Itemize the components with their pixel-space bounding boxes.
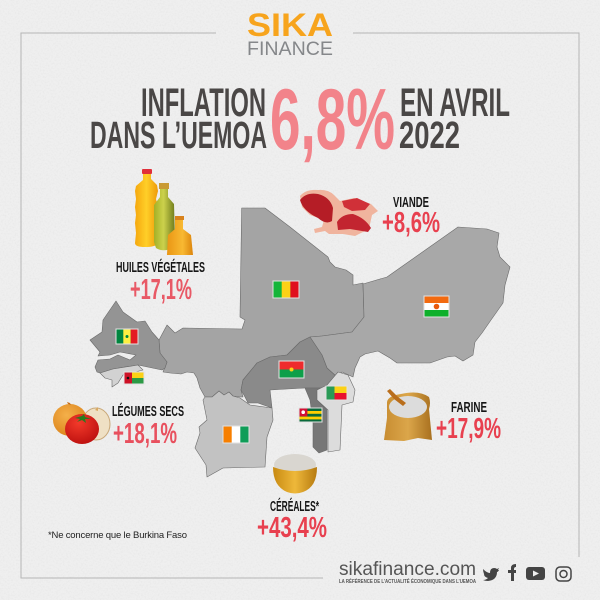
country: Guinea-Bissau — [100, 365, 143, 387]
flag: Senegal — [116, 329, 138, 344]
item: farine — [384, 389, 501, 445]
title: DANS L’UEMOA — [90, 115, 267, 157]
logo: FINANCE — [247, 39, 333, 60]
flag: Burkina Faso — [279, 361, 304, 378]
title: 6,8% — [270, 72, 395, 168]
icon: twitter — [483, 568, 499, 581]
icon: flour sack — [384, 389, 432, 441]
label: FARINE — [451, 400, 487, 416]
icon: bowl of cereal — [273, 454, 317, 494]
country: Senegal — [90, 301, 167, 373]
logo — [247, 7, 333, 60]
flag: Mali — [273, 281, 299, 298]
label: HUILES VÉGÉTALES — [116, 259, 205, 276]
label: LÉGUMES SECS — [112, 403, 184, 420]
footer website: LA RÉFÉRENCE DE L’ACTUALITÉ ÉCONOMIQUE DANS L’UEMOA — [339, 577, 476, 585]
country: Niger — [310, 227, 510, 377]
value: +17,1% — [130, 274, 192, 306]
country: Togo — [305, 388, 327, 453]
value: +18,1% — [113, 418, 177, 450]
icon: youtube — [526, 567, 545, 580]
value: +17,9% — [436, 413, 501, 445]
country: Burkina Faso — [241, 337, 337, 408]
icon: oil bottles — [135, 169, 193, 255]
item: viande — [300, 190, 440, 239]
flag: Benin — [326, 386, 347, 400]
value: +8,6% — [382, 207, 440, 239]
item: céréales — [257, 454, 327, 544]
title: INFLATION — [141, 81, 266, 125]
title: EN AVRIL — [400, 81, 510, 125]
social icons — [483, 564, 571, 581]
flag: Guinea-Bissau — [124, 372, 144, 384]
flag: Niger — [424, 296, 449, 317]
title — [90, 72, 510, 168]
value: +43,4% — [257, 512, 327, 544]
flag: Togo — [299, 408, 322, 422]
logo: SIKA — [247, 7, 333, 43]
title: 2022 — [399, 115, 460, 157]
country: Benin — [317, 372, 355, 452]
footnote: *Ne concerne que le Burkina Faso — [48, 530, 187, 541]
icon: meat — [300, 190, 378, 236]
icon: facebook — [508, 564, 516, 581]
country: Mali — [159, 208, 364, 397]
item: huiles végétales — [116, 169, 205, 306]
icon: onions and tomato — [53, 402, 110, 444]
footer website: sikafinance.com — [339, 559, 476, 580]
item: légumes secs — [53, 402, 184, 450]
flag: Côte d'Ivoire — [223, 426, 249, 443]
map of UEMOA — [90, 208, 510, 477]
label: VIANDE — [393, 195, 429, 211]
country: Côte d'Ivoire — [195, 391, 273, 477]
icon: instagram — [556, 567, 571, 581]
label: CÉRÉALES* — [270, 498, 319, 515]
